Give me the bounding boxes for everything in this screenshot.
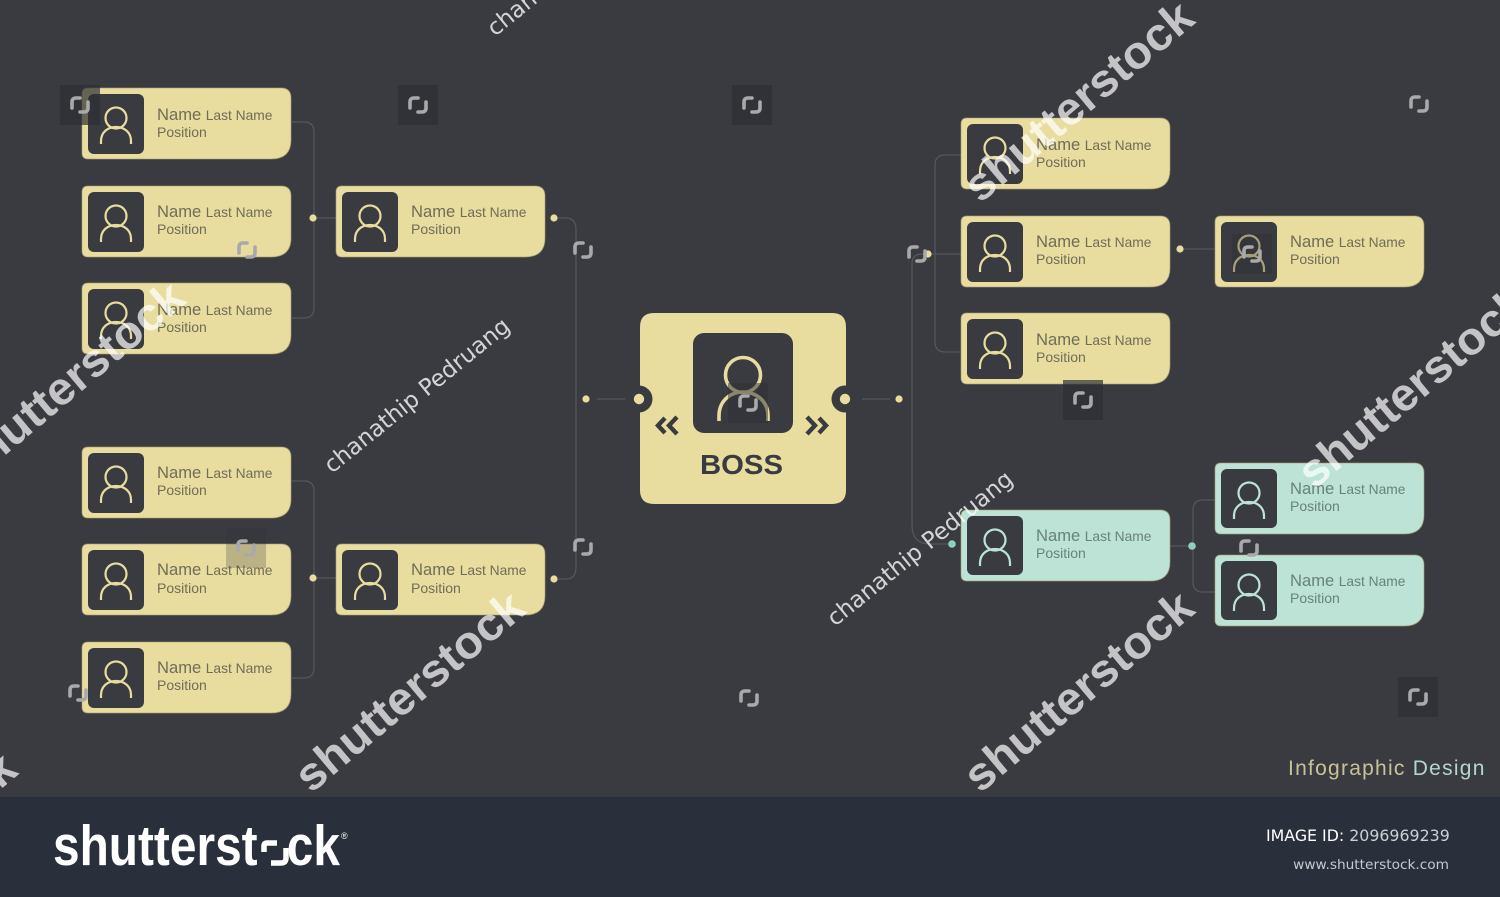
card: teal report 1 bbox=[1215, 463, 1424, 534]
card: far right yellow: Position bbox=[1290, 251, 1340, 267]
card: teal report 2: Position bbox=[1290, 590, 1340, 606]
footer logo: shutterstock bbox=[53, 814, 340, 878]
card: teal report 1: Position bbox=[1290, 498, 1340, 514]
card: bottom left manager bbox=[336, 544, 545, 615]
card: top right 3: Position bbox=[1036, 349, 1086, 365]
watermark: shutterstock repeated: shutterstock bbox=[953, 580, 1204, 802]
card: bottom left 3 bbox=[82, 642, 291, 713]
card: bottom left 1: Position bbox=[157, 482, 207, 498]
card: top left manager bbox=[336, 186, 545, 257]
card: top left 3 bbox=[82, 283, 291, 354]
card: far right yellow: Name Last Name bbox=[1290, 232, 1406, 251]
card: top left 2 bbox=[82, 186, 291, 257]
card: top left 1: Position bbox=[157, 124, 207, 140]
card: bottom left 2 bbox=[82, 544, 291, 615]
card: top right 2: Position bbox=[1036, 251, 1086, 267]
watermark: contributor name repeated: chanathip Pedruang bbox=[319, 313, 515, 479]
card: far right yellow bbox=[1215, 216, 1424, 287]
card: bottom left 3: Name Last Name bbox=[157, 658, 273, 677]
card: top left manager: Name Last Name bbox=[411, 202, 527, 221]
website: www.shutterstock.com bbox=[1293, 857, 1449, 873]
card: teal manager: Position bbox=[1036, 545, 1086, 561]
watermark marks bbox=[60, 85, 1438, 717]
card: top right 3: Name Last Name bbox=[1036, 330, 1152, 349]
panel: boss card bbox=[626, 313, 858, 504]
card: teal report 2: Name Last Name bbox=[1290, 571, 1406, 590]
card: bottom left 1: Name Last Name bbox=[157, 463, 273, 482]
card: top left 3: Name Last Name bbox=[157, 300, 273, 319]
card: bottom left 1 bbox=[82, 447, 291, 518]
footer logo: ® bbox=[341, 831, 348, 841]
card: top right 2 bbox=[961, 216, 1170, 287]
boss label: BOSS bbox=[700, 449, 783, 480]
icon: left chevrons bbox=[658, 417, 677, 434]
card: teal report 1: Name Last Name bbox=[1290, 479, 1406, 498]
icon: right chevrons bbox=[807, 417, 826, 434]
card: top right 1 bbox=[961, 118, 1170, 189]
watermark: contributor name repeated: chanathip Pedruang bbox=[822, 466, 1018, 632]
watermark: shutterstock repeated: shutterstock bbox=[284, 580, 535, 802]
card: top right 2: Name Last Name bbox=[1036, 232, 1152, 251]
caption: infographic design: Infographic Design bbox=[1288, 757, 1486, 780]
watermark: contributor name repeated bbox=[319, 0, 1018, 632]
footer bar bbox=[0, 797, 1500, 897]
card: bottom left manager: Position bbox=[411, 580, 461, 596]
card: bottom left 2: Position bbox=[157, 580, 207, 596]
card: top left 3: Position bbox=[157, 319, 207, 335]
card: top right 3 bbox=[961, 313, 1170, 384]
card: top left 2: Position bbox=[157, 221, 207, 237]
card: top left 1 bbox=[82, 88, 291, 159]
boss portrait bbox=[693, 333, 793, 433]
card: bottom left 3: Position bbox=[157, 677, 207, 693]
card: teal report 2 bbox=[1215, 555, 1424, 626]
card: teal manager: Name Last Name bbox=[1036, 526, 1152, 545]
card: top right 1: Name Last Name bbox=[1036, 135, 1152, 154]
connector lines bbox=[292, 122, 1215, 678]
card: top left 2: Name Last Name bbox=[157, 202, 273, 221]
card: bottom left 2: Name Last Name bbox=[157, 560, 273, 579]
connector dots bbox=[309, 214, 1196, 583]
card: top right 1: Position bbox=[1036, 154, 1086, 170]
card: bottom left manager: Name Last Name bbox=[411, 560, 527, 579]
card: top left manager: Position bbox=[411, 221, 461, 237]
card: teal manager bbox=[961, 510, 1170, 581]
card: top left 1: Name Last Name bbox=[157, 105, 273, 124]
image id: IMAGE ID: 2096969239 bbox=[1266, 826, 1450, 845]
watermark: shutterstock repeated: shutterstock bbox=[953, 0, 1204, 212]
